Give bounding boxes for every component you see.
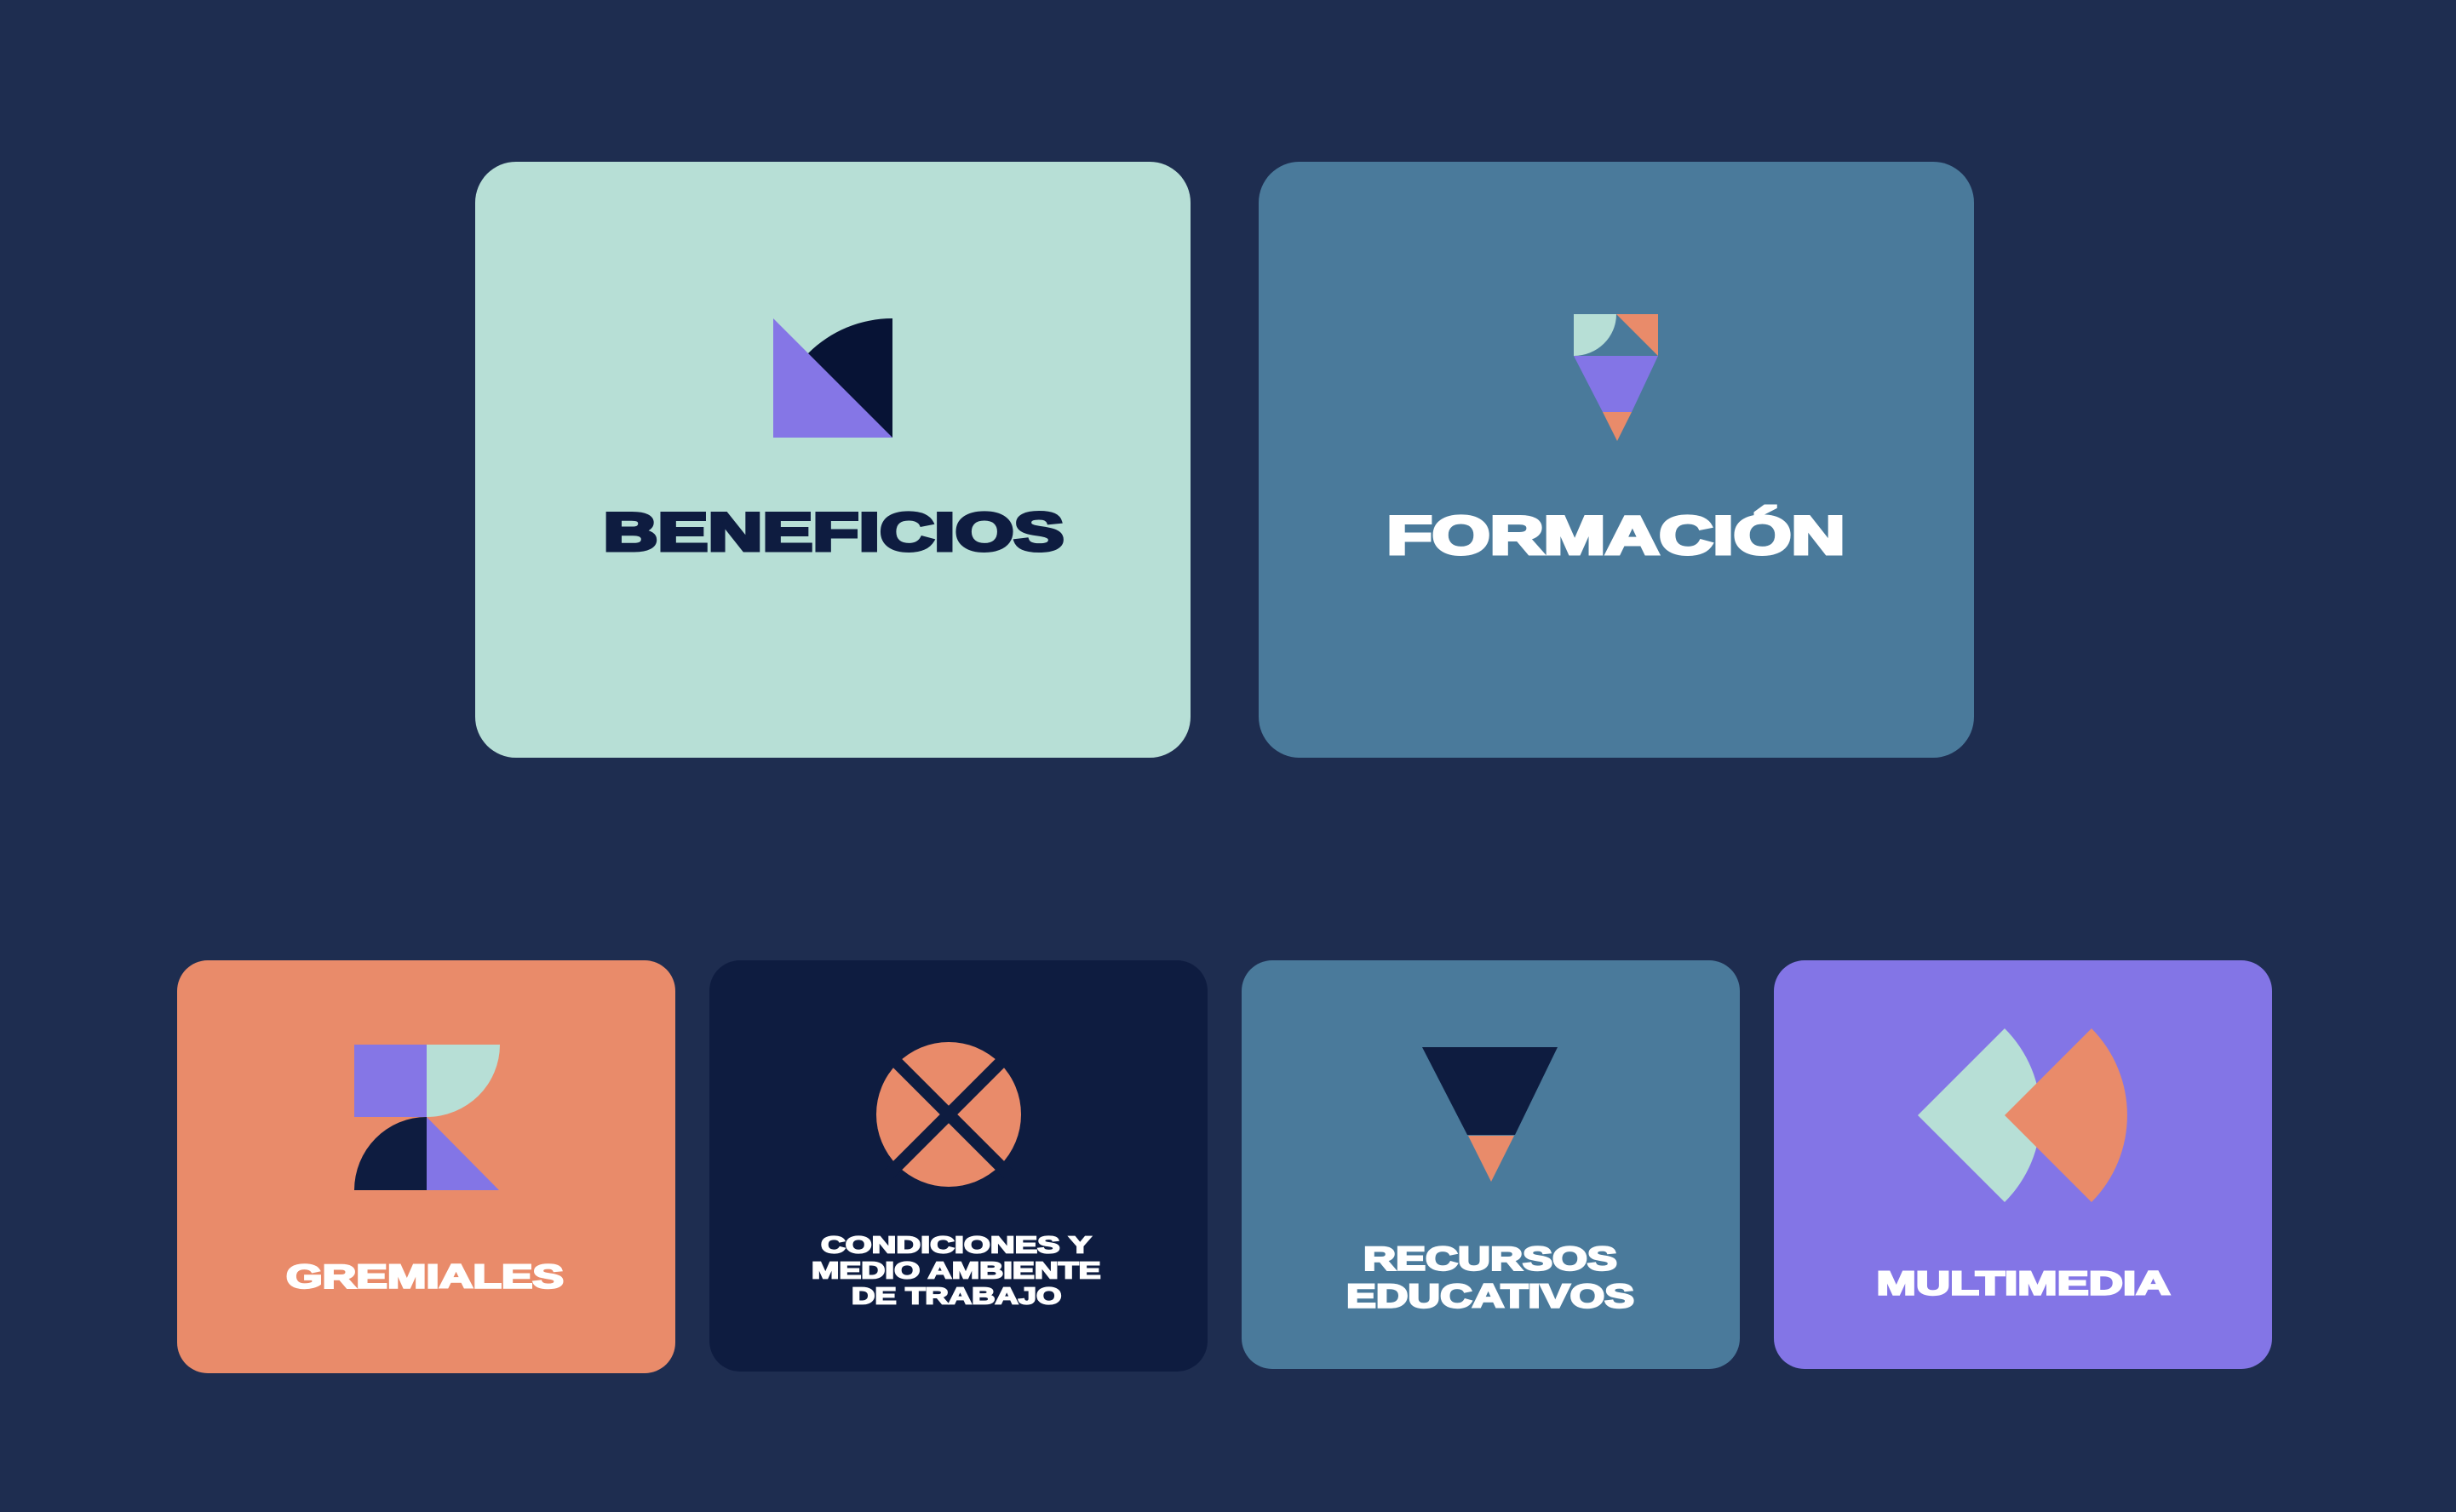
label: Recursos educativos: RECURSOS (1363, 1241, 1617, 1277)
card background: Multimedia (1774, 960, 2272, 1369)
label: Multimedia: MULTIMEDIA (1877, 1265, 2170, 1303)
icon: overlapping sectors (1918, 1028, 2127, 1202)
card background: Beneficios (475, 162, 1191, 758)
card background: Formación (1259, 162, 1974, 758)
icon: inverted triangle (1422, 1047, 1558, 1182)
icon: circle divided by X (876, 1042, 1021, 1187)
icon: Gremiales geometric K (354, 1045, 500, 1190)
panel: Formación (1259, 162, 1974, 758)
panel: Multimedia (1774, 960, 2272, 1369)
card background: Gremiales (177, 960, 675, 1373)
label: Gremiales: GREMIALES (286, 1258, 564, 1296)
label: Condiciones y medio ambiente de trabajo: MEDIO AMBIENTE (812, 1257, 1100, 1284)
icon: Beneficios triangle and quarter circle (773, 318, 892, 438)
icon: Formación cone (1574, 314, 1658, 441)
panel: Recursos educativos (1242, 960, 1740, 1369)
label: Condiciones y medio ambiente de trabajo: DE TRABAJO (852, 1282, 1061, 1309)
label: Condiciones y medio ambiente de trabajo: CONDICIONES Y (821, 1231, 1092, 1258)
label: Recursos educativos: EDUCATIVOS (1346, 1279, 1634, 1314)
heading: Formación: FORMACIÓN (1386, 506, 1845, 565)
card background: Recursos educativos (1242, 960, 1740, 1369)
panel: Gremiales (177, 960, 675, 1373)
card background: Condiciones (709, 960, 1208, 1372)
heading: Beneficios: BENEFICIOS (603, 502, 1064, 562)
panel: Condiciones y medio ambiente de trabajo (709, 960, 1208, 1372)
label: Recursos educativos (1346, 1241, 1634, 1314)
label: Condiciones y medio ambiente de trabajo (812, 1231, 1100, 1309)
panel: Beneficios (475, 162, 1191, 758)
